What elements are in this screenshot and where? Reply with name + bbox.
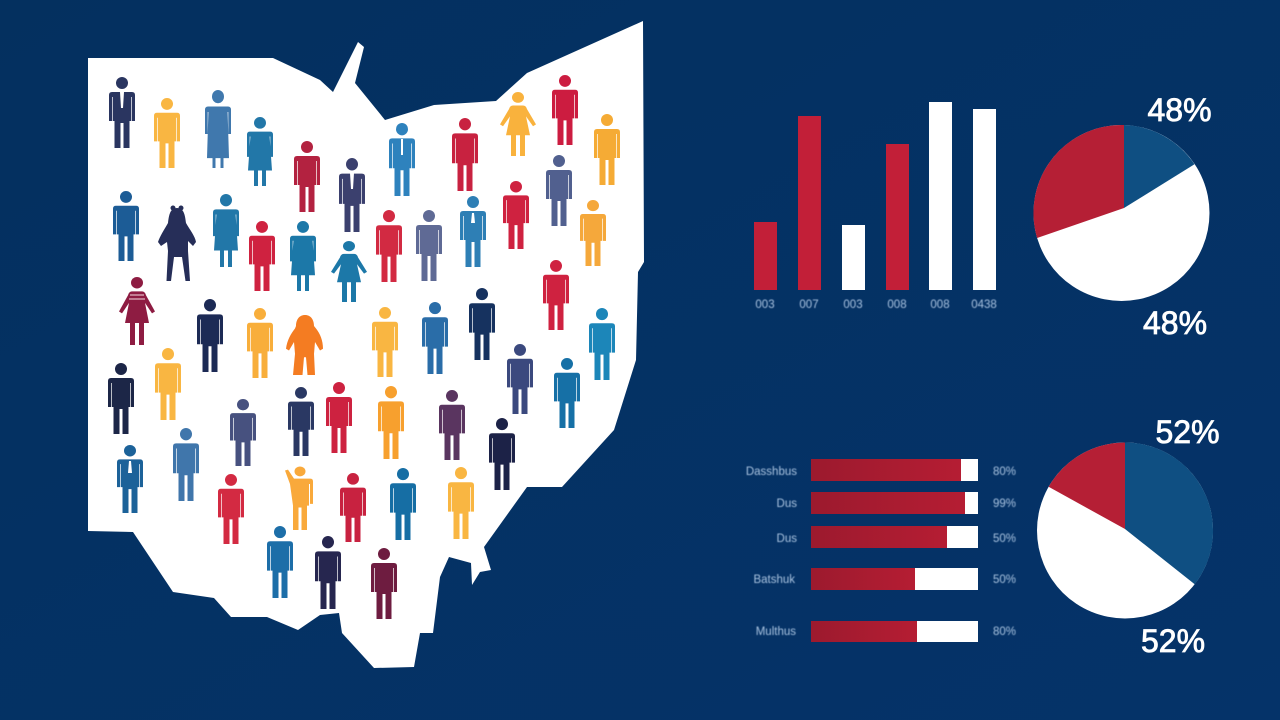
figure: person 51	[315, 536, 341, 609]
figure: person 8	[452, 118, 478, 191]
bar value labels: 80%	[993, 626, 1016, 638]
figure: person 52	[371, 548, 397, 619]
column axis labels	[755, 299, 997, 311]
column 2	[798, 116, 821, 290]
slice: blue	[1125, 442, 1213, 584]
figure: person 16	[416, 210, 442, 281]
bar category labels: Dus	[777, 533, 797, 545]
figure: person 35	[108, 363, 134, 434]
figure: person 28	[372, 307, 398, 377]
figure: person 32	[589, 308, 615, 380]
bar row 5	[811, 621, 978, 642]
figure: person 5	[294, 141, 320, 212]
bar category labels: Dasshbus	[746, 466, 797, 478]
figure: person 14	[580, 200, 606, 266]
figure: person 25	[197, 299, 223, 372]
figure: person 20	[249, 221, 275, 291]
figure: person 42	[489, 418, 515, 490]
figure: person 18	[331, 241, 367, 302]
figure: person 40	[378, 386, 404, 459]
column axis labels: 0438	[971, 299, 997, 311]
figure: person 27	[286, 315, 323, 375]
figure: person 30	[469, 288, 495, 360]
pie chart: top	[1033, 125, 1210, 301]
bar category labels: Multhus	[756, 626, 796, 638]
figure: person 2	[154, 98, 180, 168]
figure: person 49	[448, 467, 474, 539]
slice: red	[1049, 442, 1125, 529]
slice: blue	[1124, 125, 1194, 208]
figure: person 31	[543, 260, 569, 330]
figure: person 46	[285, 466, 313, 530]
figure: person 10	[552, 75, 578, 145]
bar row 2	[811, 492, 978, 514]
figure: person 38	[288, 387, 314, 456]
figure: person 34	[554, 358, 580, 428]
label: bottom pie lower percentage: 52%	[1141, 623, 1205, 659]
figure: person 17	[376, 210, 402, 282]
figure: person 36	[155, 348, 181, 420]
column axis labels: 003	[755, 299, 775, 311]
figure: person 15	[460, 196, 486, 267]
slice: red	[1033, 125, 1124, 238]
bar value labels: 80%	[993, 466, 1016, 478]
figure: person 48	[390, 468, 416, 540]
column 6	[973, 109, 996, 290]
bar category labels: Batshuk	[753, 574, 795, 586]
horizontal bar chart	[746, 459, 1016, 642]
figure: person 4	[247, 117, 273, 186]
figure: person 43	[117, 445, 143, 513]
figure: person 3	[205, 90, 231, 168]
figure: person 44	[173, 428, 199, 501]
column 5	[929, 102, 952, 290]
column chart	[754, 102, 997, 311]
column axis labels: 008	[887, 299, 907, 311]
figure: person 6	[339, 158, 365, 232]
map of Ohio with population figures	[88, 21, 644, 668]
figure: person 39	[326, 382, 352, 453]
figure: person 37	[230, 399, 256, 466]
column axis labels: 003	[843, 299, 863, 311]
bar category labels	[746, 466, 797, 638]
figure: person 1	[109, 77, 135, 148]
figure: person 41	[439, 390, 465, 460]
figure: person 11	[594, 114, 620, 185]
figure: person 13	[503, 181, 529, 249]
bar value labels: 99%	[993, 498, 1016, 510]
figure: person 24	[119, 277, 155, 345]
figure: person 50	[267, 526, 293, 598]
figure: person 7	[389, 123, 415, 196]
figure: person 22	[158, 206, 196, 281]
figure: person 21	[213, 194, 239, 267]
bar category labels: Dus	[777, 498, 797, 510]
figure: person 9	[500, 92, 536, 156]
label: bottom pie upper percentage: 52%	[1155, 414, 1220, 450]
column 3	[842, 225, 865, 290]
slice: white	[1037, 442, 1213, 618]
pie chart: bottom	[1037, 442, 1213, 618]
bar value labels: 50%	[993, 533, 1016, 545]
figure: person 12	[546, 155, 572, 226]
bar value labels: 50%	[993, 574, 1016, 586]
slice: white	[1034, 125, 1210, 301]
figure: person 23	[113, 191, 139, 261]
figure: person 26	[247, 308, 273, 378]
figure: person 33	[507, 344, 533, 414]
figure: person 45	[218, 474, 244, 544]
people group	[108, 75, 620, 619]
bar value labels	[993, 466, 1016, 638]
state outline	[88, 21, 644, 668]
figure: person 47	[340, 473, 366, 542]
bar row 4	[811, 568, 978, 590]
label: top pie lower percentage: 48%	[1143, 305, 1207, 341]
bar row 3	[811, 526, 978, 548]
column 1	[754, 222, 777, 290]
figure: person 19	[290, 221, 316, 291]
bar row 1	[811, 459, 978, 481]
figure: person 29	[422, 302, 448, 374]
label: top pie upper percentage: 48%	[1147, 92, 1212, 128]
column 4	[886, 144, 909, 290]
column axis labels: 008	[930, 299, 950, 311]
column axis labels: 007	[799, 299, 819, 311]
